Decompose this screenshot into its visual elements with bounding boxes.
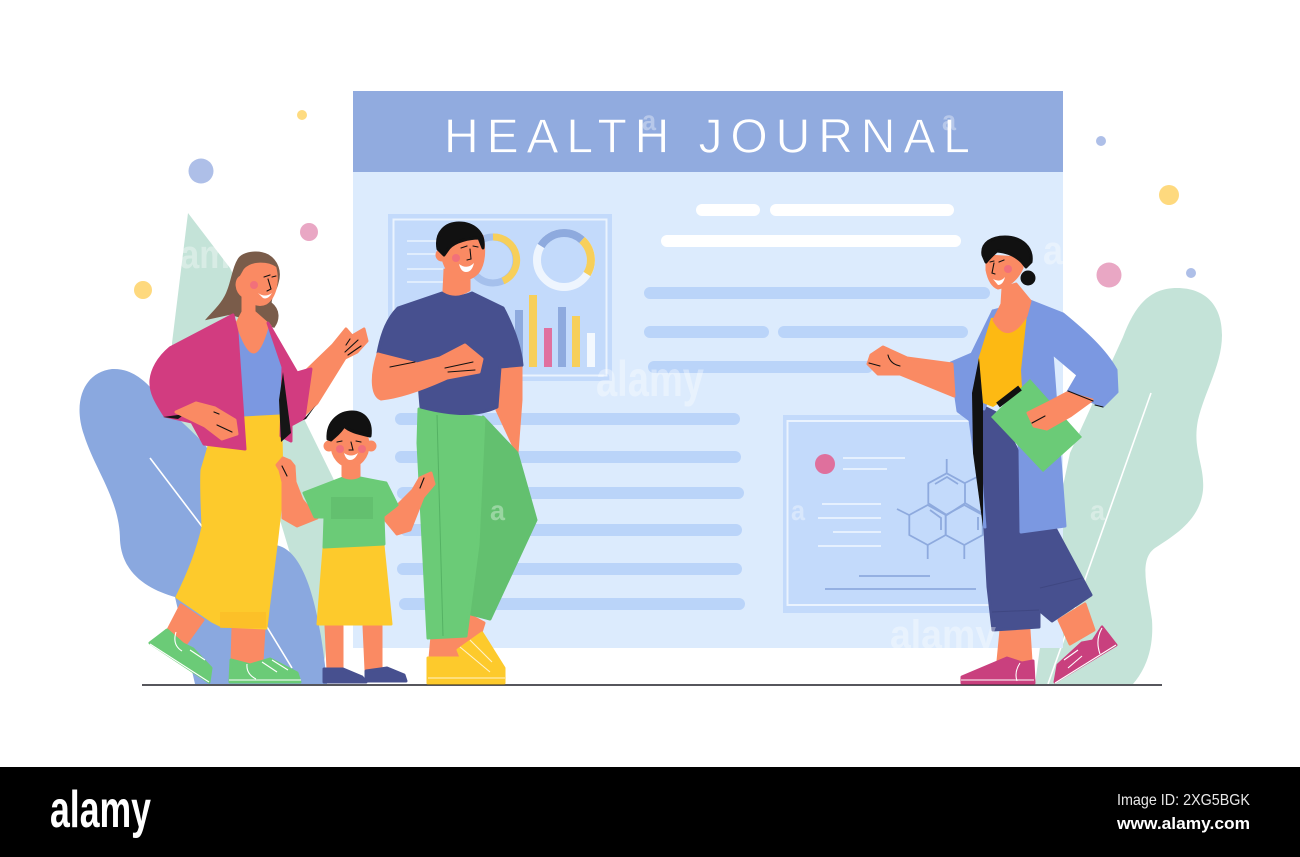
raised arm (305, 329, 367, 414)
front leg (168, 605, 203, 645)
watermarks (180, 105, 1105, 657)
watermarks: alamy (596, 351, 704, 407)
watermarks: a (490, 495, 505, 526)
doctor hair (983, 237, 1031, 267)
man shoes (458, 633, 504, 682)
heading lines (661, 204, 961, 247)
chart panel (388, 214, 612, 381)
bar chart (515, 295, 595, 367)
plant: left blue blob (80, 369, 327, 684)
panel text lines (818, 458, 905, 546)
watermarks: am (180, 233, 230, 277)
ground line (142, 684, 1162, 686)
character: boy (277, 412, 434, 682)
plant: left mint leaf (172, 213, 334, 660)
title: HEALTH JOURNAL (444, 110, 970, 164)
shoes (150, 630, 211, 682)
back leg (232, 628, 264, 662)
clipboard (991, 379, 1082, 472)
footer bar (0, 767, 1300, 857)
hand on hip (176, 403, 237, 439)
cardigan (151, 315, 245, 449)
boy shoes (324, 669, 366, 682)
watermarks: a (791, 495, 805, 526)
tank top (237, 328, 283, 418)
donut chart one (470, 237, 517, 283)
trouser cuff lines (992, 578, 1082, 612)
character: doctor on right (868, 237, 1117, 683)
footer logo: alamy (50, 781, 151, 839)
doctor smile (993, 277, 1005, 285)
doctor trousers (981, 407, 1091, 630)
doctor yellow top (978, 314, 1027, 407)
watermarks: a (1090, 495, 1105, 526)
molecule panel (783, 415, 1000, 613)
boy legs (326, 626, 342, 670)
watermarks: a (642, 105, 656, 136)
man folded arm (373, 345, 482, 399)
website: www.alamy.com (1116, 815, 1250, 833)
molecule diagram (897, 459, 985, 559)
trouser cuff shading (182, 592, 266, 628)
doctor shoes (962, 658, 1034, 683)
watermarks: alamy (890, 613, 997, 657)
chart legend lines (407, 241, 443, 282)
man t-shirt (378, 293, 522, 414)
decorative dots (134, 110, 1196, 299)
man smile (459, 263, 474, 272)
doctor coat lining (972, 358, 983, 527)
boy smile (344, 453, 358, 460)
hair (207, 252, 279, 327)
lower text lines (395, 413, 745, 610)
doctor hand on clipboard (1028, 393, 1092, 429)
man face (442, 236, 484, 279)
character: woman on left (150, 252, 367, 682)
man legs (465, 615, 484, 645)
plant: right mint blob (1035, 288, 1222, 684)
man neck (444, 270, 469, 294)
boy arms (277, 458, 317, 526)
doctor chest (994, 284, 1030, 332)
image id: Image ID: 2XG5BGK (1117, 792, 1250, 809)
watermarks: a (1043, 229, 1064, 273)
boy shirt (304, 478, 397, 547)
pink dot (815, 454, 835, 474)
donut chart two (537, 233, 591, 287)
doctor face (987, 256, 1022, 288)
panel: journal page (353, 91, 1063, 648)
front trouser leg (418, 409, 484, 638)
boy shorts (318, 545, 391, 624)
boy hair (328, 412, 370, 440)
doctor legs (998, 630, 1031, 661)
doctor lab coat (979, 301, 1117, 532)
man hair (438, 223, 483, 255)
upper text lines (644, 287, 990, 373)
boy head (332, 424, 368, 466)
watermarks: a (942, 105, 956, 136)
character: man (373, 223, 536, 683)
journal header (353, 91, 1063, 172)
hand detail lines (214, 339, 361, 432)
doctor pointing arm (868, 347, 954, 396)
face and neck (236, 264, 276, 360)
yellow trousers (177, 416, 282, 628)
man right arm (497, 365, 521, 453)
back trouser leg (452, 417, 536, 619)
boy neck (343, 464, 359, 478)
